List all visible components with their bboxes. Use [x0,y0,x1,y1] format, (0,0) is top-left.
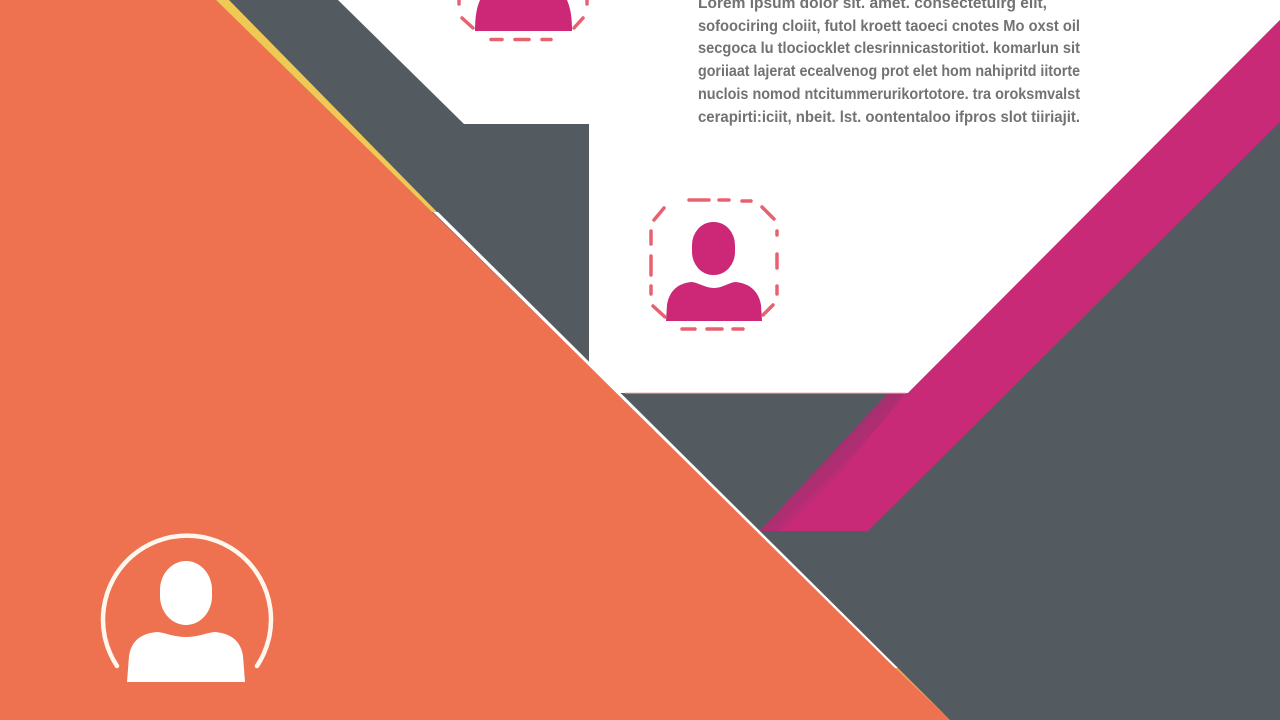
magenta ribbon [625,20,1280,531]
body [127,632,245,682]
text block: paragraph: secgoca lu tlociocklet clesrinnicastoritiot. komarlun sit [698,40,1081,57]
icon: large white person with arc [103,536,271,682]
text block: paragraph: sofoociring cloiit, futol kroett taoeci cnotes Mo oxst oil [698,18,1080,35]
text block: paragraph: goriiaat lajerat ecealvenog prot elet hom nahipritd iitorte [698,63,1080,80]
panel: orange triangle [0,0,950,720]
arc [103,536,271,666]
person body [666,282,762,321]
panel: white content sheet [338,0,1280,393]
yellow edge stripe [216,0,437,212]
icon: middle person in dashed frame [651,200,777,329]
white edge stripe [433,212,898,668]
text block: paragraph: nuclois nomod ntcitummerurikortotore. tra oroksmvalst [698,86,1081,103]
text block: paragraph: cerapirti:iciit, nbeit. lst. oontentaloo ifpros slot tiiriajit. [698,109,1080,126]
yellow edge stripe lower [895,668,950,720]
person head [692,222,735,275]
icon: top person in dashed frame [459,0,587,40]
dashed frame [651,200,777,329]
text block: paragraph [698,0,1081,126]
head [160,561,212,625]
